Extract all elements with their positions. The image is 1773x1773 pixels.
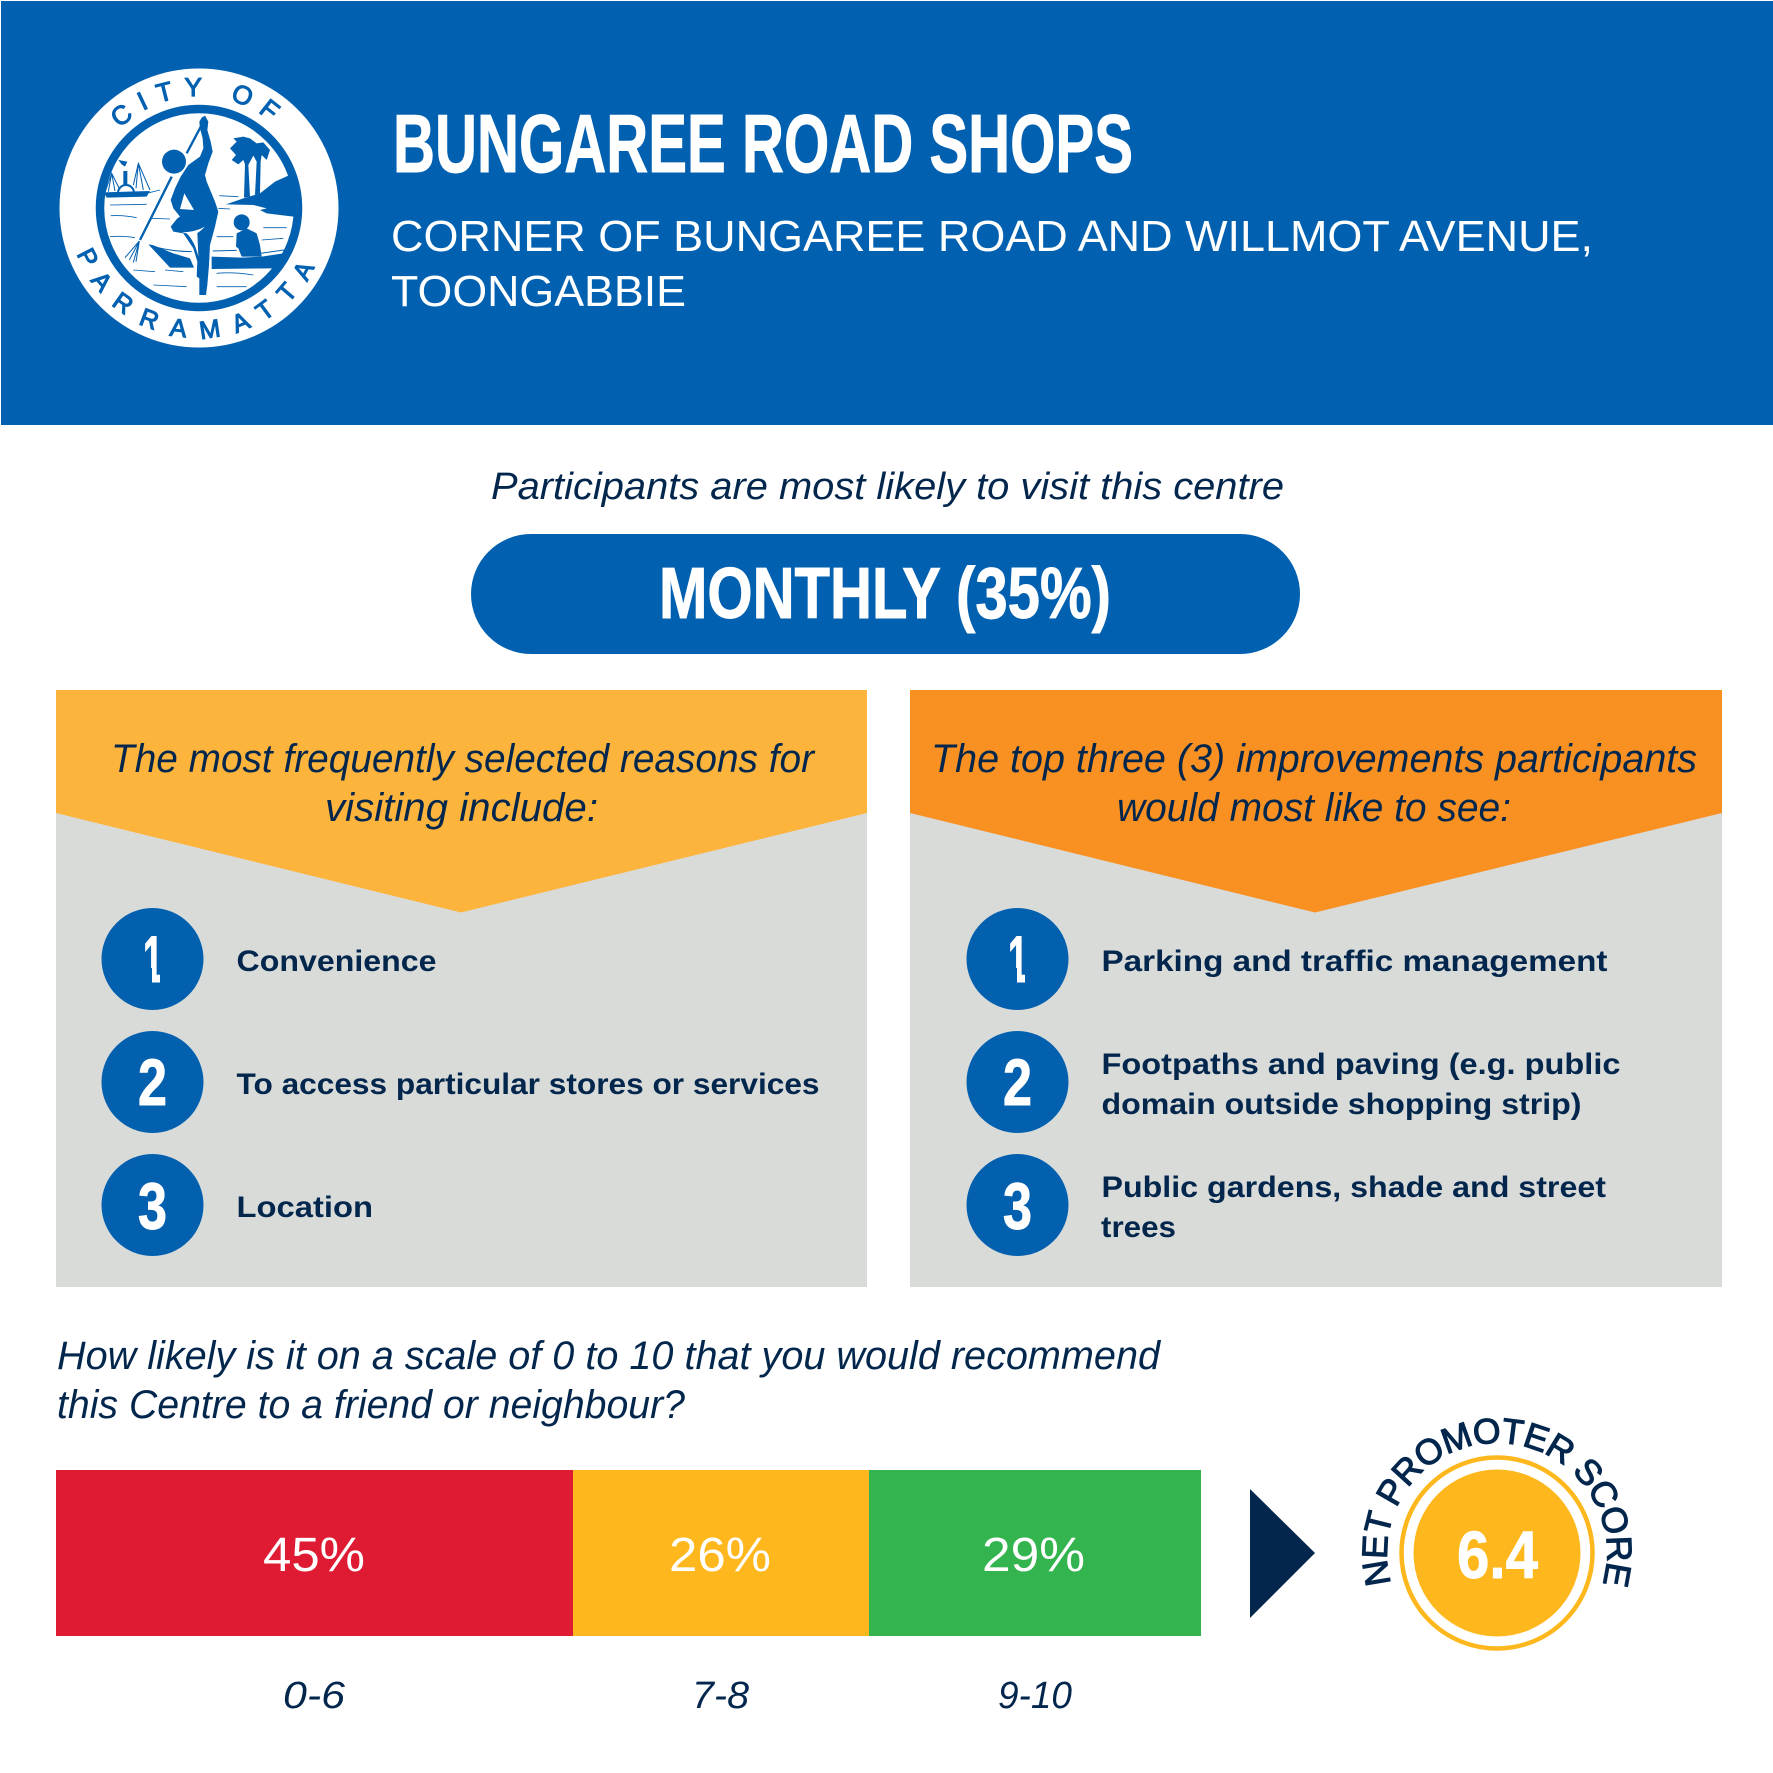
item 1: 1 — [1008, 922, 1028, 996]
woman figure — [171, 116, 218, 295]
panel: reasons for visiting — [56, 690, 867, 1287]
item 1: 1 — [143, 922, 163, 996]
pill: monthly — [471, 534, 1300, 654]
net promoter score badge — [1362, 1418, 1632, 1651]
bar labels: 0-6 — [283, 1675, 346, 1717]
recommendation question — [57, 1334, 1162, 1427]
chevron header — [56, 690, 867, 912]
item 2 — [102, 1031, 820, 1133]
bar labels — [283, 1675, 1072, 1717]
boy in canoe — [234, 214, 250, 230]
curved label: NET PROMOTER SCORE — [1362, 1418, 1632, 1588]
bar labels: 7-8 — [692, 1675, 749, 1717]
address — [391, 212, 1593, 316]
stacked bar chart: 45% — [263, 1529, 365, 1582]
panel heading — [931, 737, 1697, 830]
item 3: Public gardens, shade and street — [1102, 1171, 1606, 1204]
chevron header — [910, 690, 1722, 912]
address: TOONGABBIE — [391, 267, 686, 316]
item 1: Parking and traffic management — [1102, 945, 1608, 978]
item 1 — [966, 908, 1608, 1010]
address: CORNER OF BUNGAREE ROAD AND WILLMOT AVENUE, — [391, 212, 1593, 261]
item 2: 2 — [1003, 1045, 1032, 1119]
bar labels: 9-10 — [998, 1675, 1072, 1717]
pill: monthly: MONTHLY (35%) — [659, 554, 1111, 634]
arrow — [1250, 1489, 1315, 1618]
item 3: Location — [236, 1191, 373, 1224]
visit frequency intro: Participants are most likely to visit this centre — [491, 466, 1284, 508]
item 3: 3 — [1003, 1169, 1032, 1243]
item 2: To access particular stores or services — [236, 1068, 820, 1101]
paddle steamer — [105, 163, 150, 192]
recommendation question: this Centre to a friend or neighbour? — [57, 1383, 686, 1427]
item 1: Convenience — [236, 945, 436, 978]
panel heading: would most like to see: — [1117, 786, 1511, 830]
item 2: Footpaths and paving (e.g. public — [1102, 1048, 1620, 1081]
item 2: 2 — [138, 1045, 167, 1119]
stacked bar chart: 26% — [669, 1529, 771, 1582]
stacked bar chart: 29% — [982, 1529, 1085, 1582]
item 3: trees — [1101, 1211, 1176, 1244]
panel: top improvements — [910, 690, 1722, 1287]
recommendation question: How likely is it on a scale of 0 to 10 that you would recommend — [57, 1334, 1162, 1378]
item 1 — [102, 908, 436, 1010]
canoe — [148, 244, 194, 268]
item 3 — [966, 1154, 1606, 1256]
logo: City of Parramatta seal: PARRAMATTA — [76, 247, 316, 340]
panel heading: visiting include: — [325, 786, 598, 830]
item 3 — [102, 1154, 373, 1256]
spear — [140, 125, 202, 240]
net promoter score badge: 6.4 — [1457, 1518, 1538, 1593]
logo: City of Parramatta seal — [60, 68, 338, 348]
panel heading: The top three (3) improvements participants — [931, 737, 1697, 781]
palm tree and island — [230, 137, 270, 198]
water ripples — [110, 190, 287, 287]
item 2: domain outside shopping strip) — [1102, 1088, 1582, 1121]
logo illustration — [104, 116, 301, 295]
title: BUNGAREE ROAD SHOPS — [393, 97, 1133, 190]
header banner — [1, 1, 1773, 425]
panel heading: The most frequently selected reasons for — [111, 737, 816, 781]
item 2 — [966, 1031, 1620, 1133]
panel heading — [111, 737, 816, 830]
logo: City of Parramatta seal: CITY OF — [112, 78, 282, 125]
item 3: 3 — [138, 1169, 167, 1243]
stacked bar chart — [56, 1470, 1201, 1717]
